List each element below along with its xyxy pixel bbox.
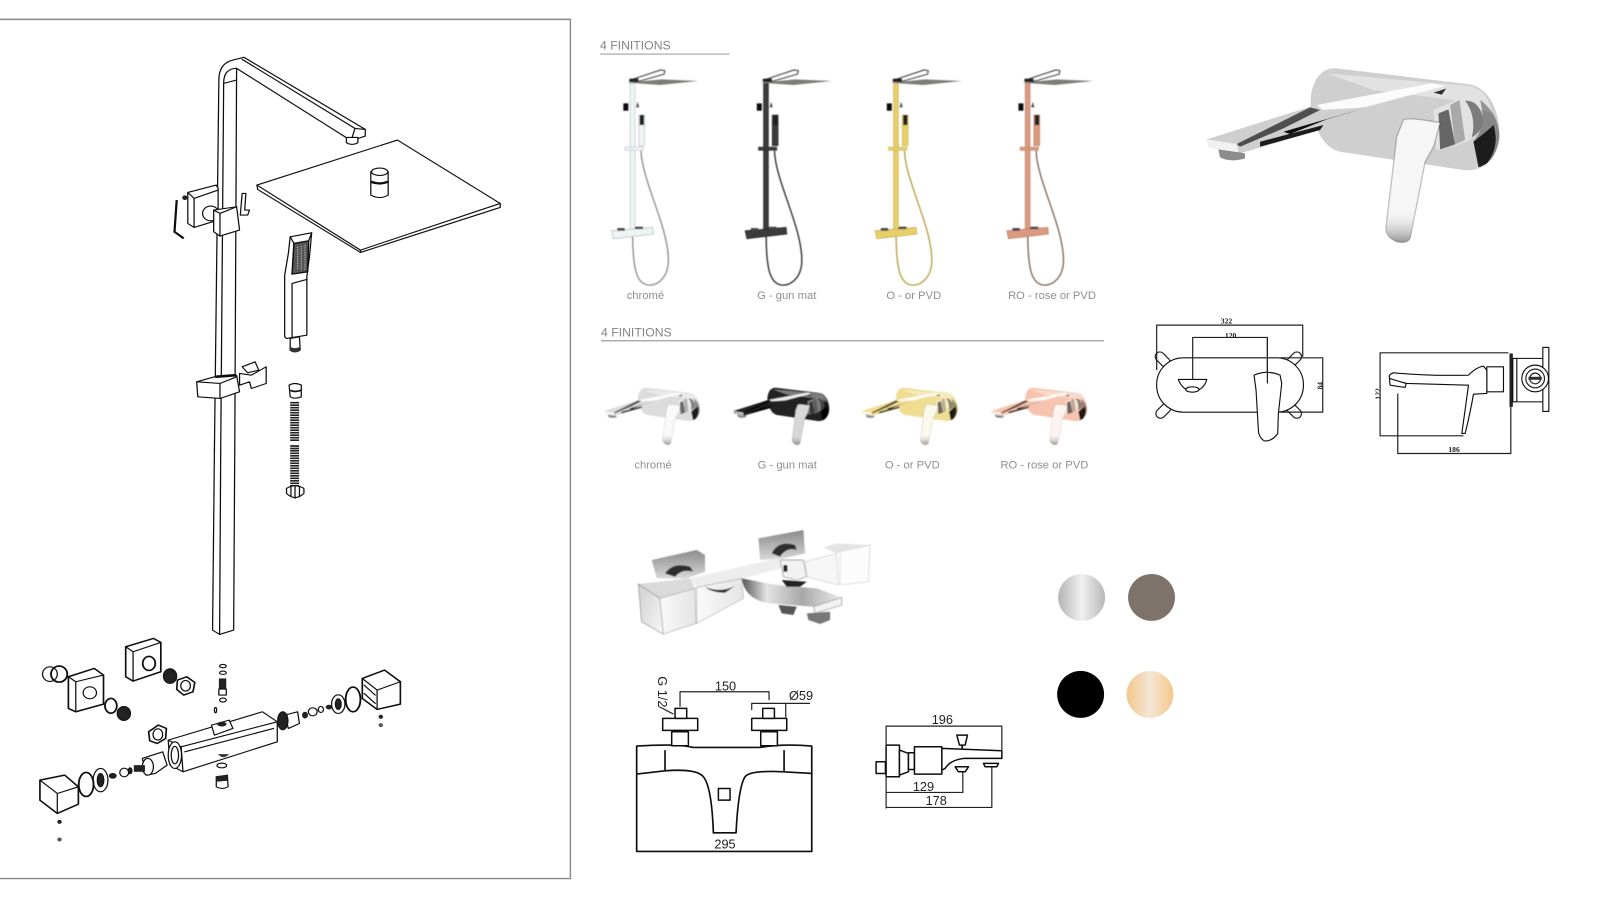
faucet finish labels: G - gun mat: [758, 459, 818, 471]
faucet front dimension drawing: 322: [1221, 316, 1232, 325]
faucet finishes row: [604, 388, 1087, 445]
hose bottom: [287, 450, 304, 498]
thermostat body: [168, 712, 277, 772]
finish colour swatches: [1057, 574, 1175, 718]
faucet front dimension drawing: 84: [1315, 382, 1324, 390]
rose shower column: [1007, 70, 1093, 285]
right cartridge and knob assembly: [278, 670, 400, 730]
hand shower: [285, 233, 312, 352]
shower finish labels: RO - rose or PVD: [1008, 290, 1096, 302]
shower finish labels: O - or PVD: [886, 290, 941, 302]
rose faucet: [991, 388, 1087, 445]
faucet finish labels: chromé: [634, 459, 672, 471]
bath mixer front dimension drawing: 295: [714, 836, 736, 851]
swatch: black: [1057, 671, 1104, 718]
gold shower column: [875, 70, 962, 285]
hose top fitting: [289, 383, 301, 450]
bath mixer side dimension drawing: [876, 712, 1002, 808]
heading: 4 finitions faucets: 4 FINITIONS: [601, 326, 672, 340]
bath mixer front dimension drawing: G 1/2: [655, 676, 670, 707]
heading: 4 finitions shower columns: 4 FINITIONS: [600, 38, 671, 52]
gold faucet: [862, 388, 958, 445]
faucet finish labels: [634, 459, 1088, 471]
faucet front dimension drawing: 120: [1225, 331, 1237, 340]
bath mixer side dimension drawing: 178: [926, 793, 947, 808]
centre fittings: [214, 664, 228, 788]
faucet side dimension drawing: [1374, 347, 1549, 454]
faucet finish labels: RO - rose or PVD: [1000, 459, 1088, 471]
bath mixer side dimension drawing: 196: [932, 712, 953, 727]
left cartridge and knob assembly: [40, 752, 167, 841]
wall mount square B: [126, 638, 195, 743]
swatch: gun metal: [1128, 574, 1175, 621]
wall bracket and hex key: [174, 185, 250, 238]
panel frame: [0, 19, 570, 879]
panel: exploded parts diagram: [0, 19, 570, 879]
faucet side dimension drawing: 186: [1448, 445, 1460, 454]
swatch: chrome: [1058, 574, 1105, 621]
large wall faucet photo: [1207, 68, 1500, 242]
swatch: rose gold: [1127, 671, 1173, 718]
rain shower head: [257, 140, 500, 252]
shower column upper parts: [174, 57, 500, 450]
heading: 4 finitions shower columns: [600, 38, 730, 55]
gun metal faucet: [733, 388, 829, 445]
bath mixer front dimension drawing: [637, 676, 813, 852]
shower column lower parts: [40, 450, 400, 841]
shower finish labels: [627, 290, 1096, 302]
bath mixer photo: [638, 530, 870, 634]
gun metal shower column: [745, 70, 832, 285]
faucet side dimension drawing: 122: [1374, 388, 1383, 400]
shower column finishes row: [612, 70, 1093, 285]
riser pipe and overhead arm: [214, 57, 365, 450]
riser bottom: [213, 450, 235, 634]
faucet front dimension drawing: [1153, 316, 1324, 441]
chrome shower column: [612, 70, 698, 285]
bath mixer front dimension drawing: 150: [715, 678, 736, 693]
chrome faucet: [604, 388, 700, 445]
faucet finish labels: O - or PVD: [885, 459, 940, 471]
bath mixer side dimension drawing: 129: [913, 779, 934, 794]
shower finish labels: G - gun mat: [757, 290, 817, 302]
wall mount square A: [43, 666, 131, 720]
sliding holder: [197, 362, 266, 398]
bath mixer front dimension drawing: Ø59: [789, 688, 813, 703]
shower finish labels: chromé: [627, 290, 664, 302]
